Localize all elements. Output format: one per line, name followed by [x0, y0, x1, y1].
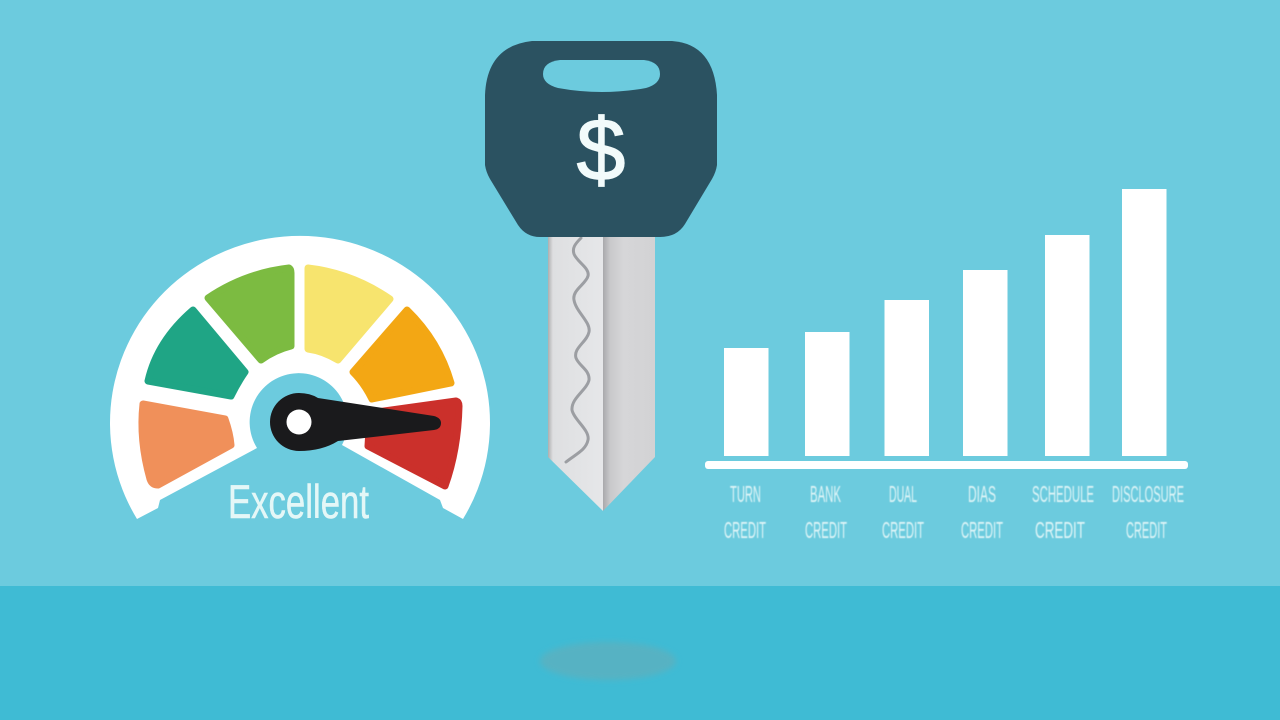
- bar 5: [1045, 235, 1090, 456]
- gauge white body: [110, 236, 490, 519]
- credit score gauge: [110, 236, 490, 528]
- label 5 bottom: CREDIT: [1035, 517, 1085, 543]
- bar 4: [963, 270, 1008, 456]
- chart labels: CREDIT: [961, 517, 1003, 543]
- chart labels: CREDIT: [724, 517, 766, 543]
- label column 1: TURN: [730, 481, 761, 507]
- key shadow on floor: [540, 642, 676, 680]
- gauge segment: light green: [208, 268, 291, 360]
- key: [485, 41, 717, 511]
- needle body: [270, 393, 441, 451]
- blade right face: [603, 236, 655, 511]
- bar chart: DISCLOSURE: [1112, 481, 1184, 507]
- label column 5: [1032, 481, 1094, 543]
- label column 3: [882, 481, 924, 543]
- chart labels: [724, 481, 1184, 543]
- label column 6: [1112, 481, 1184, 543]
- blade left face: [548, 236, 603, 511]
- blade wavy groove: [566, 238, 589, 462]
- gauge segment: red: [368, 401, 459, 486]
- chart baseline: [705, 461, 1188, 469]
- label column 2: [805, 481, 847, 543]
- floor band: [0, 586, 1280, 720]
- key blade: [548, 236, 655, 511]
- gauge label: Excellent: [228, 475, 369, 528]
- gauge needle: [270, 393, 441, 451]
- label column 6: CREDIT: [1126, 517, 1167, 543]
- bar chart: [705, 189, 1188, 543]
- bar 1: [724, 348, 768, 456]
- key head: [485, 41, 717, 237]
- chart labels: CREDIT: [882, 517, 924, 543]
- gauge segment: yellow: [308, 268, 390, 360]
- chart labels: CREDIT: [805, 517, 847, 543]
- label column 1: [724, 481, 766, 543]
- bar 2: [805, 332, 850, 456]
- gauge segment: teal green: [148, 310, 245, 396]
- gauge segment: orange: [142, 404, 231, 485]
- label 2 top: BANK: [810, 481, 841, 507]
- bar 6: [1122, 189, 1166, 456]
- bar 3: [884, 300, 929, 456]
- label 4 top: DIAS: [968, 481, 996, 507]
- label column 3: DUAL: [889, 481, 917, 507]
- label column 4: [961, 481, 1003, 543]
- key slot: [543, 60, 660, 92]
- dollar sign: $: [577, 100, 625, 199]
- gauge segment: amber: [353, 310, 451, 399]
- needle pivot: [286, 410, 312, 434]
- chart labels: SCHEDULE: [1032, 481, 1094, 507]
